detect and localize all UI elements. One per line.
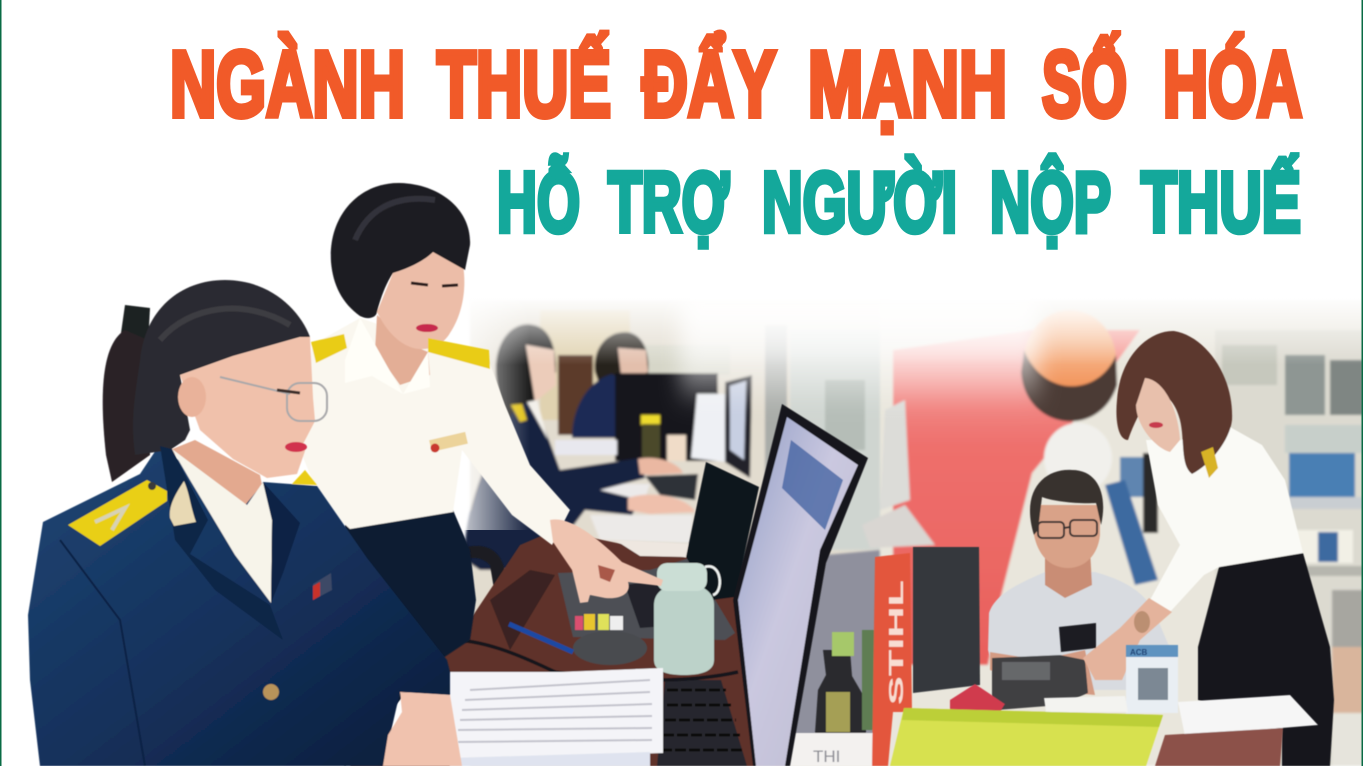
round white fan: [1044, 423, 1112, 493]
eye: [277, 390, 300, 393]
books under keyboard: [615, 540, 688, 557]
pen: [509, 624, 573, 652]
right edge border: [1362, 0, 1363, 766]
neck: [375, 315, 430, 385]
jacket: [28, 444, 450, 766]
white top fade over photos: [440, 270, 1363, 365]
ear: [178, 377, 206, 417]
center wash: [680, 295, 1040, 410]
shirt body: [302, 318, 570, 545]
name badge: [429, 432, 468, 452]
lips: [1149, 422, 1163, 428]
red STIHL panel: [872, 553, 912, 766]
dim area behind monitor: [788, 550, 880, 735]
gold button: [263, 684, 279, 700]
papers: [355, 668, 663, 766]
photo: shop background: [788, 300, 1363, 766]
arm: [990, 650, 1095, 695]
right shelves: [1215, 330, 1363, 766]
large monitor: [733, 404, 868, 766]
paper: [1178, 695, 1318, 736]
title line 2: HỖ: [497, 156, 580, 250]
hanging goods: [1105, 453, 1158, 585]
title line 1: MẠNH: [808, 32, 1007, 136]
red cloth: [950, 684, 1005, 712]
title line 1: NGÀNH: [170, 32, 405, 136]
side monitor: [725, 375, 752, 478]
cable: [445, 640, 738, 680]
title line 1: ĐẨY: [642, 32, 776, 136]
calendar: [691, 394, 730, 462]
mint bottle: [654, 563, 720, 675]
neck and jaw skin: [170, 440, 262, 505]
hair: [1030, 470, 1103, 535]
mouse: [573, 631, 647, 665]
neck: [1045, 550, 1092, 598]
background worker near: [465, 324, 695, 570]
leaf pin: [170, 481, 196, 526]
shop man with customer: [913, 470, 1175, 710]
white collar: [172, 449, 272, 603]
head: [1034, 505, 1100, 568]
flag pin: [313, 573, 332, 600]
yellow bottle: [641, 415, 660, 460]
small cup: [667, 435, 686, 461]
desktop monitor back: [615, 373, 718, 461]
lips: [285, 442, 307, 452]
desk: [1155, 728, 1283, 766]
eyes: [411, 283, 458, 286]
printer: [992, 655, 1088, 710]
green folder: [890, 708, 1163, 766]
ponytail: [103, 330, 150, 482]
qr stand: ACB: [1130, 648, 1148, 657]
watch: [1134, 611, 1150, 633]
seam: [60, 540, 145, 766]
seated officer in navy jacket: [28, 280, 462, 766]
wood desk: [350, 530, 760, 766]
title line 2: TRỢ: [608, 156, 729, 250]
arm with watch: [1083, 598, 1172, 680]
photo: tax office background: [465, 300, 890, 766]
epaulet right: [428, 338, 490, 369]
monitor on shop desk: [913, 547, 980, 693]
face: [180, 337, 315, 478]
small epaulet behind: [292, 470, 317, 485]
bottom white counter: [788, 733, 874, 766]
standing officer in white shirt: [300, 183, 663, 766]
keyboard bottom: [657, 680, 747, 766]
yellow epaulet: [68, 480, 167, 546]
plastic bag: [880, 400, 910, 510]
hair: [133, 280, 310, 455]
t-shirt: [988, 572, 1175, 690]
title line 2: NỘP: [990, 154, 1111, 250]
red STIHL panel: STIHL: [886, 580, 908, 705]
red wall: [893, 330, 1140, 665]
title line 1: THUẾ: [437, 32, 611, 136]
laptop: [558, 462, 759, 640]
shop desk objects: [788, 553, 1318, 766]
hand on paper: [383, 692, 462, 766]
epaulet left: [311, 334, 347, 363]
collar: [345, 318, 430, 394]
oil bottles: [815, 630, 874, 733]
phone: [1059, 623, 1096, 652]
shop staff woman: [1059, 331, 1334, 766]
lapel left: [160, 446, 283, 640]
gold tie: [1201, 447, 1218, 478]
left wash behind officer: [440, 290, 530, 530]
hands on keyboard: [638, 458, 683, 475]
shirt: [1146, 427, 1303, 612]
skirt: [300, 510, 476, 766]
face: [1136, 378, 1180, 452]
lapel right: [263, 482, 300, 603]
face: [377, 252, 464, 349]
qr stand: [1126, 645, 1178, 713]
shop desk objects: THI: [813, 747, 840, 766]
background worker far: [572, 332, 648, 438]
chair: [105, 305, 150, 445]
hair: [1116, 331, 1232, 474]
title line 1: [170, 32, 1302, 136]
hair: [331, 183, 470, 318]
orange helmet: [1021, 310, 1117, 421]
pointing hand: [550, 519, 663, 603]
title line 2: NGƯỜI: [762, 156, 957, 250]
title line 1: SỐ: [1042, 32, 1127, 136]
lips: [416, 324, 438, 332]
office desk: [350, 404, 868, 766]
chair arm: [463, 546, 505, 595]
left edge border: [0, 0, 2, 766]
title line 2: [497, 154, 1301, 250]
skirt: [1198, 553, 1334, 766]
glasses: [220, 377, 327, 421]
glasses: [1038, 520, 1097, 538]
keyboard back: [645, 474, 698, 500]
desk papers: [555, 440, 617, 455]
